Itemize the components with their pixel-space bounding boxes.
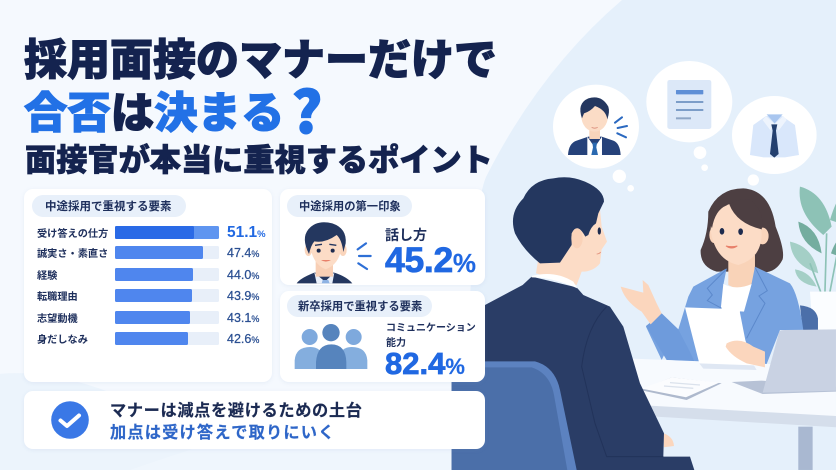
icon: interviewee bust bbox=[568, 97, 627, 155]
paper and hand bbox=[685, 307, 765, 370]
title bbox=[24, 26, 497, 180]
label: コミュニケーション能力 bbox=[386, 319, 476, 349]
icon: document bbox=[667, 80, 711, 129]
subtitle: 面接官が本当に重視するポイント bbox=[25, 135, 493, 180]
bar row: 転職理由 bbox=[37, 288, 260, 303]
icon: group of people bbox=[294, 324, 368, 369]
title line 1: 採用面接のマナーだけで bbox=[24, 26, 497, 88]
callout line 1: マナーは減点を避けるための土台 bbox=[110, 397, 363, 421]
panel: first impression bbox=[280, 189, 485, 285]
laptop bbox=[732, 329, 836, 394]
table bbox=[633, 359, 836, 470]
label: コミュニケーション能力: 能力 bbox=[386, 334, 406, 349]
icon: shirt and tie bbox=[750, 114, 799, 158]
panel: new-graduate hiring factors bbox=[280, 291, 485, 382]
icon: man speaking bbox=[296, 222, 372, 284]
stat: 45.2%: 45.2% bbox=[385, 240, 476, 280]
bar row: 志望動機: 43.1% bbox=[227, 311, 259, 325]
interviewer woman bbox=[621, 188, 803, 368]
panel heading bbox=[32, 195, 186, 217]
bar row: 身だしなみ: 身だしなみ bbox=[37, 331, 88, 346]
thought bubbles bbox=[553, 61, 817, 192]
label: コミュニケーション能力: コミュニケーション bbox=[386, 319, 476, 334]
bar row: 経験: 経験 bbox=[37, 267, 57, 282]
bar row: 志望動機 bbox=[37, 310, 260, 325]
bar row: 受け答えの仕方: 51.1% bbox=[227, 224, 266, 241]
bar row: 誠実さ・素直さ: 誠実さ・素直さ bbox=[37, 245, 108, 260]
panel heading: 新卒採用で重視する要素 bbox=[298, 298, 422, 314]
woman's chair bbox=[800, 305, 818, 330]
stat: 82.4%: 82.4% bbox=[385, 346, 465, 381]
candidate man from behind bbox=[452, 177, 694, 470]
panel heading bbox=[287, 195, 412, 217]
callout line 2: 加点は受け答えで取りにいく bbox=[110, 419, 336, 443]
bar row: 誠実さ・素直さ: 47.4% bbox=[227, 246, 259, 260]
bar row: 身だしなみ bbox=[37, 331, 260, 346]
bar row: 誠実さ・素直さ bbox=[37, 245, 260, 260]
panel heading bbox=[287, 295, 432, 317]
plant bbox=[452, 177, 836, 470]
icon: check mark bbox=[51, 401, 89, 439]
panel heading: 中途採用で重視する要素 bbox=[45, 198, 172, 214]
bar row: 志望動機: 志望動機 bbox=[37, 310, 78, 325]
label: 話し方: 話し方 bbox=[385, 225, 427, 245]
bar row: 身だしなみ: 42.6% bbox=[227, 332, 259, 346]
bar row: 受け答えの仕方: 受け答えの仕方 bbox=[37, 225, 108, 240]
clipboard bbox=[640, 377, 722, 400]
panel: mid-career hiring factors bbox=[24, 189, 272, 382]
bar row: 経験 bbox=[37, 267, 260, 282]
man's chair bbox=[452, 361, 577, 470]
bar row: 受け答えの仕方 bbox=[37, 224, 266, 241]
bar row: 経験: 44.0% bbox=[227, 268, 259, 282]
title line 2: 合否は決まる? bbox=[24, 66, 322, 150]
bar row: 転職理由: 43.9% bbox=[227, 289, 259, 303]
pot bbox=[810, 292, 836, 330]
bar row: 転職理由: 転職理由 bbox=[37, 288, 78, 303]
panel: takeaway callout bbox=[24, 391, 485, 449]
panel heading: 中途採用の第一印象 bbox=[299, 198, 401, 214]
